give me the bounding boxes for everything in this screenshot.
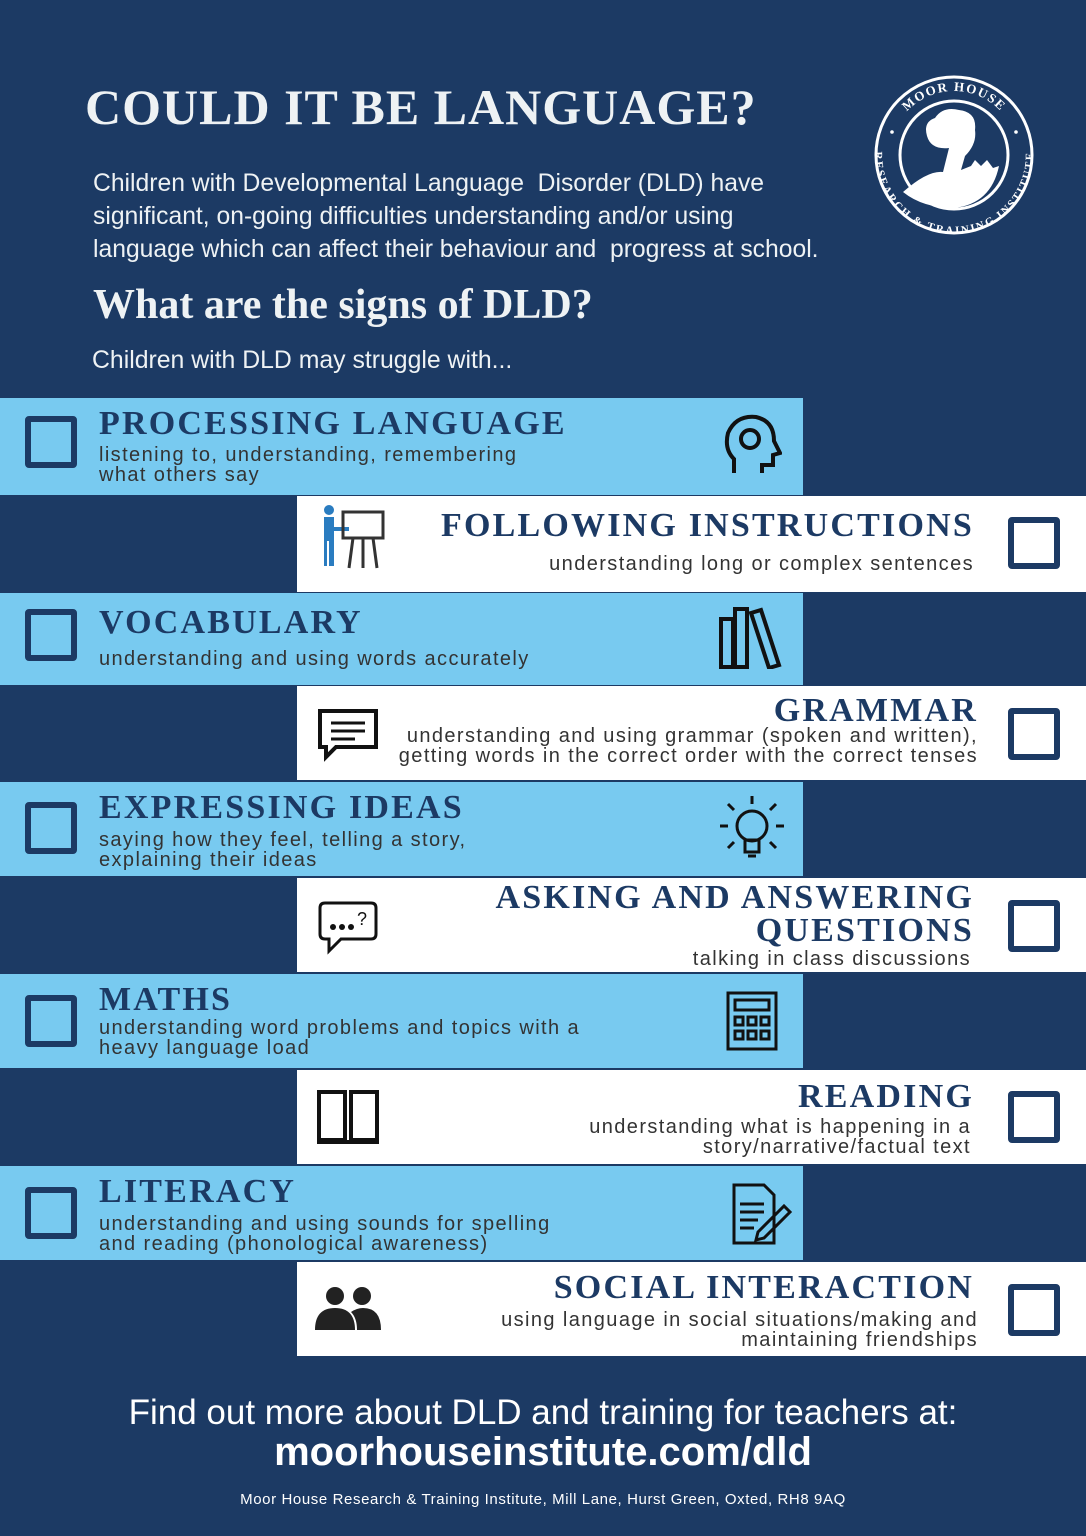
panel: following instructions: FOLLOWING INSTRUCTIONS [441, 507, 974, 544]
panel: reading: READING [798, 1078, 974, 1115]
footer address: Moor House Research & Training Institute, Mill Lane, Hurst Green, Oxted, RH8 9AQ [240, 1491, 846, 1508]
footer call to action [129, 1393, 957, 1474]
panel: vocabulary: understanding and using words accurately [99, 648, 530, 670]
title: COULD IT BE LANGUAGE? [85, 79, 757, 135]
intro text [93, 170, 819, 263]
panel: processing language: listening to, understanding, remembering [99, 444, 517, 466]
panel: grammar: understanding and using grammar (spoken and written), [407, 725, 978, 747]
panel: following instructions: understanding long or complex sentences [549, 553, 974, 575]
lead-in text: Children with DLD may struggle with... [92, 347, 512, 374]
panel: maths: MATHS [99, 981, 232, 1018]
icon: book [317, 1090, 379, 1144]
panel: asking and answering questions: ASKING AND ANSWERING [495, 879, 974, 916]
panel: social interaction: SOCIAL INTERACTION [554, 1269, 974, 1306]
panel: processing language: PROCESSING LANGUAGE [99, 405, 567, 442]
panel: grammar [297, 686, 1086, 780]
icon: lightbulb [720, 796, 784, 858]
icon: people [315, 1287, 381, 1330]
icon: document with pen [732, 1184, 792, 1244]
panel: expressing ideas: saying how they feel, telling a story, [99, 829, 466, 851]
panel: processing language [0, 398, 803, 495]
intro text: language which can affect their behaviour and progress at school. [93, 236, 819, 263]
logo: MOOR HOUSE [901, 82, 1005, 112]
panel: vocabulary: VOCABULARY [99, 604, 363, 641]
panel: social interaction: maintaining friendships [741, 1329, 978, 1351]
panel: reading [297, 1070, 1086, 1164]
footer call to action: moorhouseinstitute.com/dld [274, 1430, 812, 1474]
icon: head gear [724, 414, 782, 473]
panel: expressing ideas [0, 782, 803, 876]
logo: RESEARCH & TRAINING INSTITUTE [874, 152, 1030, 232]
panel: literacy: and reading (phonological awareness) [99, 1233, 489, 1255]
icon: teacher board [324, 505, 384, 568]
icon: calculator [726, 992, 778, 1050]
panel: literacy: LITERACY [99, 1173, 296, 1210]
panel: maths: understanding word problems and topics with a [99, 1017, 580, 1039]
icon: question bubble: ? [357, 909, 367, 929]
subheading: What are the signs of DLD? [93, 282, 593, 328]
panel: maths [0, 974, 803, 1068]
panel: grammar: GRAMMAR [774, 692, 978, 729]
panel: following instructions [297, 496, 1086, 592]
icon: question bubble [318, 902, 378, 954]
icon: speech bubble [318, 709, 378, 762]
panel: literacy [0, 1166, 803, 1260]
panel: grammar: getting words in the correct order with the correct tenses [399, 745, 978, 767]
panel: processing language: what others say [99, 464, 260, 486]
logo [874, 76, 1034, 234]
panel: maths: heavy language load [99, 1037, 310, 1059]
panel: reading: story/narrative/factual text [703, 1136, 971, 1158]
panel: asking and answering questions: QUESTIONS [756, 912, 974, 949]
panel: expressing ideas: explaining their ideas [99, 849, 318, 871]
panel: expressing ideas: EXPRESSING IDEAS [99, 789, 464, 826]
panel: vocabulary [0, 593, 803, 685]
panel: reading: understanding what is happening in a [589, 1116, 971, 1138]
panel: asking and answering questions [297, 878, 1086, 972]
intro text: Children with Developmental Language Disorder (DLD) have [93, 170, 764, 197]
panel: social interaction: using language in social situations/making and [501, 1309, 978, 1331]
panel: asking and answering questions: talking in class discussions [693, 948, 971, 970]
icon: books [719, 607, 782, 669]
intro text: significant, on-going difficulties understanding and/or using [93, 203, 733, 230]
footer call to action: Find out more about DLD and training for teachers at: [129, 1393, 957, 1432]
panel: literacy: understanding and using sounds for spelling [99, 1213, 551, 1235]
panel: social interaction [297, 1262, 1086, 1356]
